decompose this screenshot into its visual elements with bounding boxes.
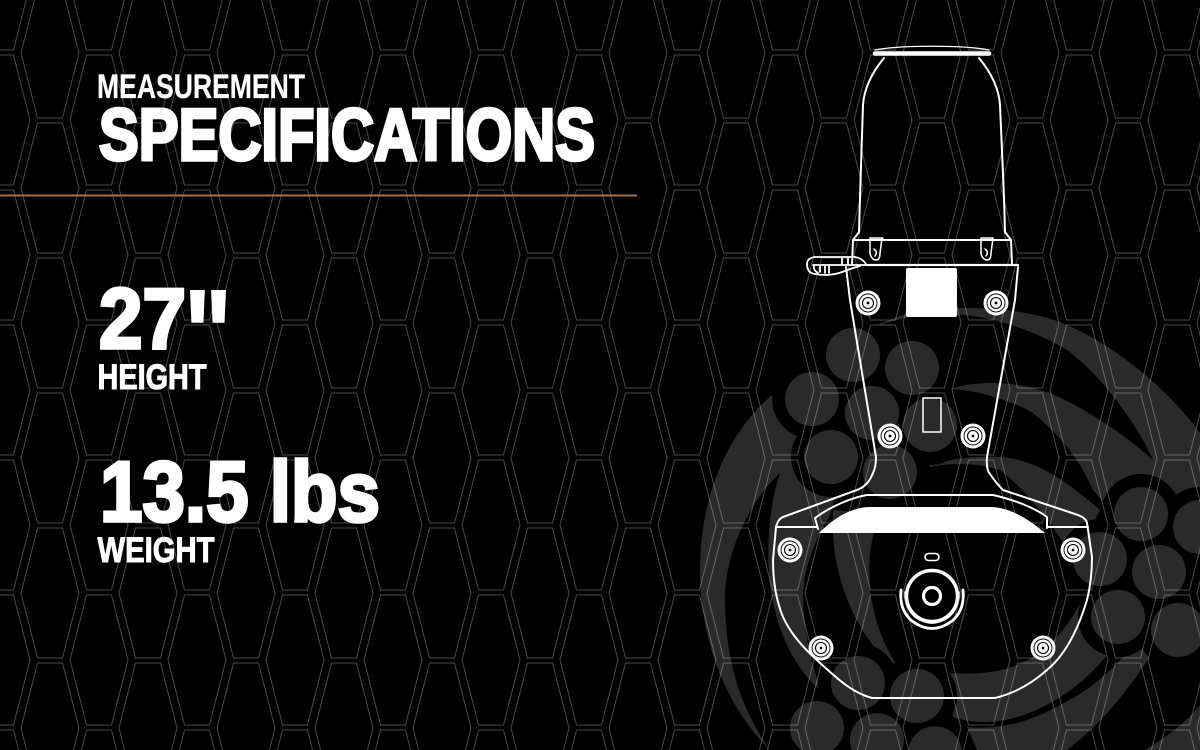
- slot: [923, 398, 941, 432]
- height value: 27: [99, 272, 186, 367]
- jar body: [853, 58, 1011, 240]
- collar base line: [868, 264, 1018, 266]
- device outline illustration: [773, 46, 1092, 698]
- title: [97, 68, 595, 176]
- height value: ": [184, 265, 232, 404]
- indicator pill: [925, 554, 939, 560]
- height value: [99, 265, 232, 404]
- divider line: [0, 194, 637, 196]
- camera lens: [901, 570, 963, 628]
- screws: [778, 290, 1086, 660]
- weight value: 13.5 lbs: [100, 445, 380, 540]
- title main: SPECIFICATIONS: [99, 95, 595, 176]
- body seam lines: [776, 526, 1088, 528]
- latch right: [981, 238, 993, 260]
- visor outline: [815, 495, 1047, 529]
- latch left: [870, 238, 883, 260]
- height label: HEIGHT: [98, 358, 206, 397]
- label plate: [906, 268, 957, 317]
- stat: height: [98, 265, 232, 404]
- body outline: [773, 267, 1092, 698]
- title kicker: MEASUREMENT: [97, 68, 305, 106]
- weight label: WEIGHT: [98, 531, 214, 570]
- visor fill: [819, 507, 1045, 533]
- jar lid: [875, 46, 989, 54]
- stat: weight: [98, 445, 380, 570]
- handle: [807, 257, 871, 275]
- watermark logo: [700, 308, 1200, 750]
- collar: [852, 240, 1012, 265]
